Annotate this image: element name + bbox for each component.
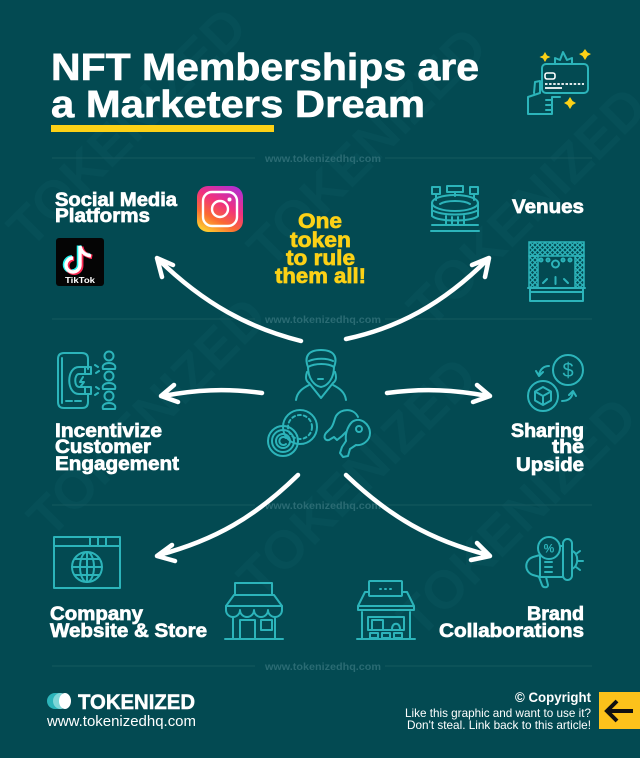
heading: incentivize customer engagement: Engagement <box>55 454 180 475</box>
icon: instagram <box>197 186 243 232</box>
footer logo <box>46 691 196 730</box>
title: a Marketers Dream <box>51 84 425 126</box>
icon: phone magnet and people <box>58 352 115 409</box>
icon: token and dollar exchange: $ <box>562 360 574 382</box>
copyright notice: Like this graphic and want to use it? <box>405 706 591 720</box>
arrow: to customer engagement <box>161 385 262 402</box>
panel: incentivize customer engagement <box>55 352 180 475</box>
icon: tokenized logo <box>47 693 71 709</box>
heading: incentivize customer engagement: Customer <box>55 437 152 458</box>
copyright notice: © Copyright <box>515 689 591 705</box>
callout: one token to rule them all: One <box>298 210 342 233</box>
copyright notice: Don't steal. Link back to this article! <box>407 718 591 732</box>
callout: one token to rule them all <box>275 210 366 288</box>
heading: brand collaborations: Collaborations <box>439 621 584 642</box>
heading: brand collaborations <box>439 604 584 642</box>
heading: incentivize customer engagement <box>55 421 180 475</box>
title <box>51 47 479 126</box>
panel: sharing the upside <box>511 355 584 476</box>
callout: one token to rule them all: them all! <box>275 265 366 288</box>
text: www.tokenizedhq.com <box>264 315 381 326</box>
icon: shop storefront <box>225 583 283 639</box>
icon: megaphone with percent badge: % <box>544 542 555 556</box>
icon: keys <box>325 410 370 457</box>
arrow: to website and store <box>157 475 298 561</box>
text: www.tokenizedhq.com <box>264 501 381 512</box>
heading: brand collaborations: Brand <box>527 604 584 625</box>
text: TOKENIZED <box>236 16 498 278</box>
icon: stage <box>528 242 585 301</box>
title: NFT Memberships are <box>51 47 479 89</box>
heading: company website and store: Company <box>50 604 143 625</box>
heading: sharing the upside: Upside <box>516 455 584 476</box>
text: TOKENIZED <box>226 346 488 608</box>
copyright notice <box>405 689 591 732</box>
heading: company website and store: Website & Store <box>50 621 207 642</box>
icon: coins <box>268 410 317 456</box>
heading: venues: Venues <box>512 197 584 218</box>
text: TOKENIZED <box>16 286 278 548</box>
text: www.tokenizedhq.com <box>264 154 381 165</box>
website address: www.tokenizedhq.com <box>46 713 196 730</box>
icon: browser window with globe <box>54 537 120 588</box>
arrow: to venues <box>346 258 489 339</box>
brand name: TOKENIZED <box>78 691 195 714</box>
text: TOKENIZED <box>0 0 258 258</box>
icon: membership card with thumbs up <box>528 49 591 114</box>
icon: megaphone with percent badge <box>526 537 583 587</box>
heading: sharing the upside: the <box>552 437 584 458</box>
arrow: to social media <box>157 258 301 341</box>
heading: incentivize customer engagement: Incentivize <box>55 421 162 442</box>
panel: brand collaborations <box>357 537 584 642</box>
arrow: to brand collaborations <box>346 475 490 560</box>
callout: one token to rule them all: token <box>290 229 351 252</box>
icon: member in cap <box>296 350 346 400</box>
back arrow tab <box>599 692 640 729</box>
callout: one token to rule them all: to rule <box>286 247 355 270</box>
panel: social media platforms <box>55 186 243 286</box>
panel: company website and store <box>50 537 283 642</box>
panel: venues <box>431 186 585 301</box>
icon: boutique storefront <box>357 581 415 639</box>
heading: social media platforms <box>55 190 177 227</box>
icon: tiktok: TikTok <box>65 275 95 285</box>
icon: stadium <box>431 186 479 231</box>
heading: sharing the upside: Sharing <box>511 421 584 442</box>
arrow: to sharing the upside <box>387 385 490 402</box>
text: www.tokenizedhq.com <box>264 662 381 673</box>
heading: social media platforms: Social Media <box>55 190 177 211</box>
heading: company website and store <box>50 604 207 642</box>
icon: tiktok <box>56 238 104 286</box>
heading: sharing the upside <box>511 421 584 476</box>
title underline <box>51 125 274 132</box>
heading: social media platforms: Platforms <box>55 206 150 227</box>
central figure: member with coins and keys <box>268 350 370 457</box>
